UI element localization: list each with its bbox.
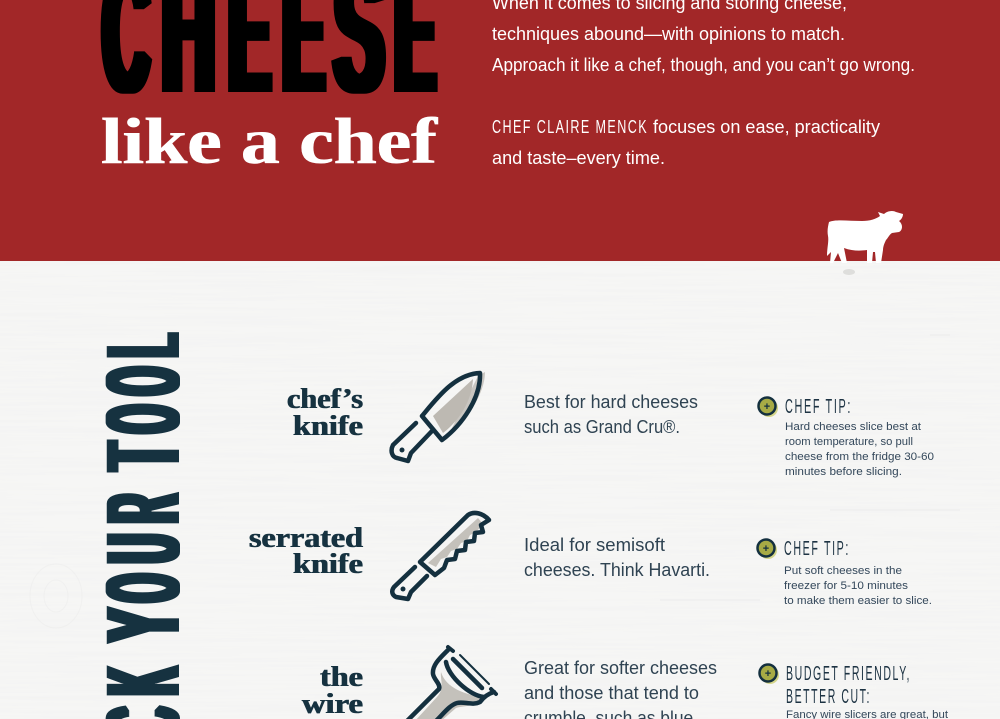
description: and those that tend to <box>524 683 699 703</box>
description <box>524 392 698 437</box>
header panel <box>0 0 1000 263</box>
chef tip: cheese from the fridge 30-60 <box>785 451 934 463</box>
budget tip <box>760 663 948 719</box>
chef tip: to make them easier to slice. <box>784 595 932 607</box>
chef tip: Put soft cheeses in the <box>784 565 902 577</box>
text: L <box>85 334 202 357</box>
label <box>287 384 363 442</box>
chef tip: + <box>764 401 770 413</box>
intro text: CHEF CLAIRE MENCK <box>492 117 648 137</box>
intro text: Approach it like a chef, though, and you can’t go wrong. <box>492 55 915 75</box>
row: chef's knife <box>287 372 934 478</box>
row: serrated knife <box>249 513 932 607</box>
icon: cow <box>827 211 903 263</box>
chef tip <box>758 396 934 478</box>
section heading: pick your tool: U <box>85 534 202 563</box>
icon: chef's knife <box>392 372 485 461</box>
description <box>524 658 717 719</box>
section heading: pick your tool: R <box>85 494 202 523</box>
row: the wire <box>302 647 948 719</box>
subtitle: like a chef: like a chef <box>101 105 438 178</box>
chef tip: Hard cheeses slice best at <box>785 421 921 433</box>
chef tip: CHEF TIP: <box>784 538 850 560</box>
section heading: pick your tool: K <box>85 667 202 695</box>
description <box>524 535 710 580</box>
chef tip: minutes before slicing. <box>785 466 902 478</box>
intro text <box>492 0 915 168</box>
budget tip: + <box>765 668 771 680</box>
description: cheeses. Think Havarti. <box>524 560 710 580</box>
intro text: and taste–every time. <box>492 148 665 168</box>
section heading: pick your tool: T <box>85 442 202 470</box>
label: the <box>320 662 363 693</box>
section heading: pick your tool: O <box>85 405 202 433</box>
label: serrated <box>249 523 363 554</box>
chef tip <box>758 538 932 607</box>
label <box>302 662 363 719</box>
chef tip: room temperature, so pull <box>785 436 913 448</box>
description: such as Grand Cru®. <box>524 417 680 437</box>
description: Best for hard cheeses <box>524 392 698 412</box>
label <box>249 523 363 580</box>
icon: cow shadow <box>843 269 855 275</box>
budget tip: BETTER CUT: <box>786 686 871 708</box>
intro text: focuses on ease, practicality <box>653 117 880 137</box>
section heading: pick your tool: Y <box>85 608 202 642</box>
description: Great for softer cheeses <box>524 658 717 678</box>
intro text: techniques abound—with opinions to match. <box>492 24 845 44</box>
chef tip: freezer for 5-10 minutes <box>784 580 909 592</box>
chef tip: + <box>763 543 769 555</box>
icon: peeler <box>405 647 496 719</box>
description: Ideal for semisoft <box>524 535 665 555</box>
label: chef’s <box>287 384 363 415</box>
chef tip: CHEF TIP: <box>785 396 852 418</box>
section heading: pick your tool: O <box>85 574 202 602</box>
label: knife <box>293 549 363 580</box>
label: knife <box>293 411 363 442</box>
section heading: pick your tool: O <box>85 367 202 395</box>
icon: serrated knife <box>392 513 489 599</box>
